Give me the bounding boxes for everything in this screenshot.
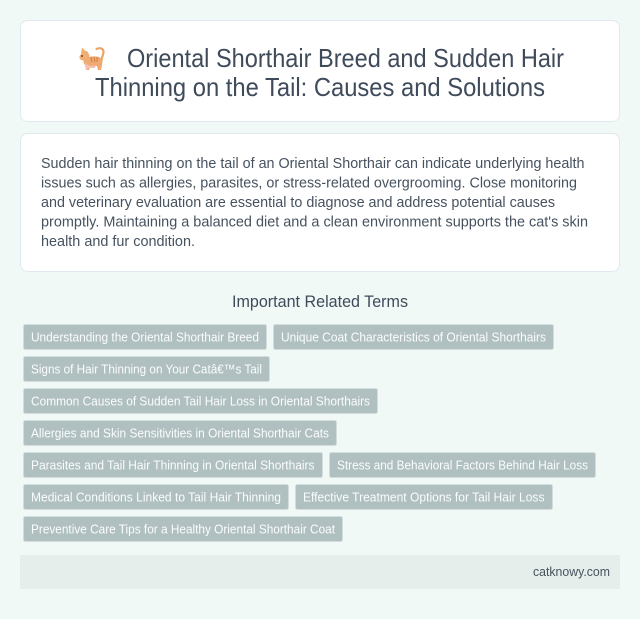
tag: coat characteristics: [274, 324, 554, 350]
description text: issues such as allergies, parasites, or stress-related overgrooming. Close monitoring: [41, 174, 577, 192]
tag: understanding the breed: Understanding the Oriental Shorthair Breed: [31, 330, 259, 344]
tag: coat characteristics: Unique Coat Characteristics of Oriental Shorthairs: [281, 330, 546, 344]
tag: parasites: Parasites and Tail Hair Thinning in Oriental Shorthairs: [31, 458, 314, 472]
tag: signs of thinning: Signs of Hair Thinning on Your Catâ€™s Tail: [31, 362, 262, 376]
title line 1: Oriental Shorthair Breed and Sudden Hair: [127, 43, 564, 73]
panel: title: [20, 20, 620, 122]
description text: promptly. Maintaining a balanced diet and a clean environment supports the cat's skin: [41, 214, 588, 230]
tag: understanding the breed: [24, 324, 266, 350]
title line 2: Thinning on the Tail: Causes and Solutions: [95, 72, 545, 102]
description text: health and fur condition.: [41, 233, 195, 250]
tag: treatment options: Effective Treatment Options for Tail Hair Loss: [303, 490, 544, 504]
icon: cat: [79, 48, 104, 70]
tag: parasites: [24, 452, 322, 478]
tag: allergies: [24, 420, 336, 446]
tag: signs of thinning: [24, 356, 270, 382]
footer site name: catknowy.com: [533, 564, 610, 579]
tag: common causes: Common Causes of Sudden Tail Hair Loss in Oriental Shorthairs: [31, 394, 370, 408]
tag: medical conditions: [24, 484, 288, 510]
tag: medical conditions: Medical Conditions Linked to Tail Hair Thinning: [31, 490, 281, 504]
footer: [20, 555, 620, 589]
tag: allergies: Allergies and Skin Sensitivities in Oriental Shorthair Cats: [31, 426, 329, 440]
description text: and veterinary evaluation are essential to diagnose and address potential causes: [41, 194, 555, 211]
tag: preventive care: [24, 516, 342, 542]
heading: related terms: Important Related Terms: [232, 293, 408, 311]
tag: preventive care: Preventive Care Tips for a Healthy Oriental Shorthair Coat: [31, 522, 335, 536]
description text: [41, 155, 588, 250]
tag: treatment options: [296, 484, 552, 510]
tag: common causes: [24, 388, 378, 414]
tag: stress factors: Stress and Behavioral Factors Behind Hair Loss: [337, 458, 588, 472]
tag: stress factors: [330, 452, 596, 478]
tag list: [24, 324, 596, 542]
panel: description: [20, 134, 620, 272]
description text: Sudden hair thinning on the tail of an Oriental Shorthair can indicate underlying health: [41, 155, 584, 172]
